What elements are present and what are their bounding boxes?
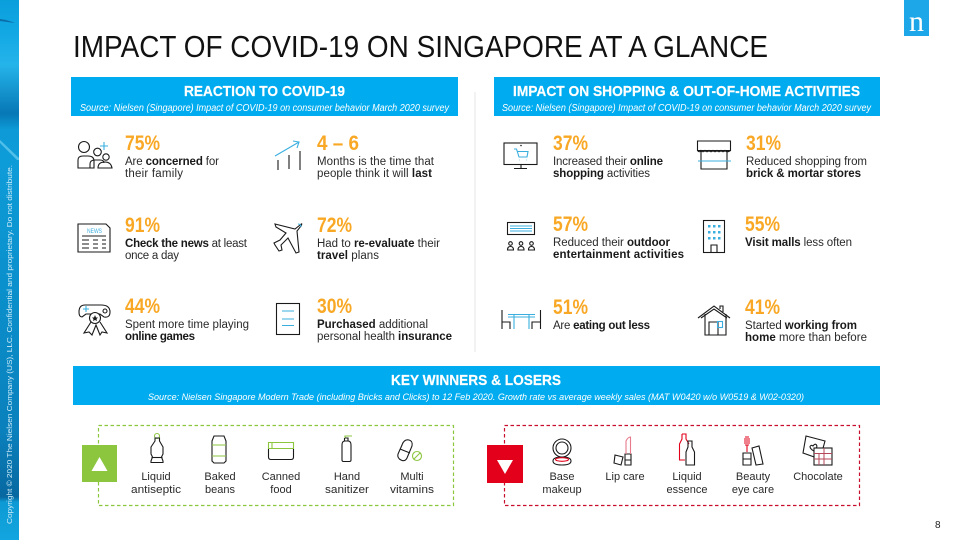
stat: 44% online games: Spent more time playing bbox=[125, 319, 249, 331]
item: beauty eye care: eye care bbox=[732, 484, 774, 496]
stat: 51% eating out bbox=[502, 296, 650, 332]
stat: 30% health insurance: 30% bbox=[317, 295, 352, 318]
item: hand sanitizer bbox=[325, 436, 369, 496]
item: chocolate: Chocolate bbox=[793, 471, 843, 483]
stat: 41% work from home bbox=[698, 296, 867, 344]
stat: 55% visit malls: Visit malls less often bbox=[745, 237, 852, 249]
panel header: impact on shopping: IMPACT ON SHOPPING & OUT-OF-HOME ACTIVITIES bbox=[513, 83, 860, 100]
stat: 75% concerned for family: their family bbox=[125, 168, 183, 180]
item: liquid essence bbox=[667, 434, 707, 496]
stat: 37% online shopping: shopping activities bbox=[553, 168, 650, 180]
panel: losers bbox=[487, 426, 860, 506]
icon: newspaper: NEWS bbox=[87, 228, 103, 235]
stat: 75% concerned for family: Are concerned for bbox=[125, 156, 219, 168]
panel header: impact on shopping bbox=[494, 77, 880, 116]
panel header: key winners and losers: KEY WINNERS & LOSERS bbox=[391, 372, 561, 389]
icon: monitor with cart bbox=[504, 143, 537, 168]
stat: 55% visit malls bbox=[704, 213, 852, 252]
stat: 44% online games: online games bbox=[125, 331, 195, 343]
item: liquid antiseptic bbox=[131, 434, 182, 496]
stat: 44% online games: 44% bbox=[125, 295, 160, 318]
item: baked beans: beans bbox=[205, 484, 235, 496]
icon: newspaper bbox=[78, 224, 110, 252]
stat: 31% brick and mortar bbox=[698, 132, 867, 180]
item: base makeup: Base bbox=[549, 471, 575, 483]
left brand strip with copyright bbox=[0, 0, 19, 540]
stat: 91% news: 91% bbox=[125, 214, 160, 237]
stat: 51% eating out: 51% bbox=[553, 296, 588, 319]
item: hand sanitizer: sanitizer bbox=[325, 484, 369, 496]
stat: 55% visit malls: 55% bbox=[745, 213, 780, 236]
stat: 41% work from home: 41% bbox=[745, 296, 780, 319]
page number: 8 bbox=[935, 520, 941, 531]
item: liquid essence: Liquid bbox=[672, 471, 702, 483]
panel header: reaction to COVID-19 bbox=[71, 77, 458, 116]
icon: family bbox=[78, 142, 112, 168]
stat: 91% news bbox=[78, 214, 248, 262]
stat: 72% travel: travel plans bbox=[317, 250, 379, 262]
item: beauty eye care bbox=[732, 437, 774, 496]
down arrow badge bbox=[487, 445, 523, 483]
item: base makeup bbox=[542, 439, 582, 496]
panel header: reaction to COVID-19: REACTION TO COVID-19 bbox=[184, 83, 345, 100]
panel header: key winners and losers bbox=[73, 366, 880, 405]
stat: 91% news: once a day bbox=[125, 250, 179, 262]
stat: 37% online shopping: Increased their online bbox=[553, 156, 663, 168]
left brand strip with copyright: Copyright © 2020 The Nielsen Company (US), LLC. Confidential and proprietary. Do not distribute. bbox=[5, 165, 14, 524]
item: liquid essence: essence bbox=[667, 484, 707, 496]
icon: house bbox=[698, 306, 730, 335]
item: multivitamins: Multi bbox=[400, 471, 424, 483]
item: hand sanitizer: Hand bbox=[334, 471, 360, 483]
panel: winners bbox=[82, 426, 454, 506]
stat: 4-6 months: people think it will last bbox=[317, 168, 432, 180]
stat: 72% travel bbox=[274, 214, 440, 262]
icon: game controller with medal bbox=[79, 305, 110, 335]
panel header: impact on shopping: Source: Nielsen (Singapore) Impact of COVID-19 on consumer behavior March 2020 survey bbox=[502, 103, 872, 114]
icon: storefront bbox=[698, 141, 731, 169]
stat: 57% outdoor entertainment: Reduced their outdoor bbox=[553, 237, 671, 249]
stat: 72% travel: Had to re-evaluate their bbox=[317, 238, 440, 250]
stat: 75% concerned for family: 75% bbox=[125, 132, 160, 155]
icon: cinema screen and audience bbox=[508, 222, 534, 250]
stat: 4-6 months: Months is the time that bbox=[317, 156, 435, 168]
stat: 44% online games bbox=[79, 295, 249, 343]
icon: dining table and chairs bbox=[502, 310, 540, 329]
item: multivitamins: vitamins bbox=[390, 484, 435, 496]
stat: 31% brick and mortar: brick & mortar stores bbox=[746, 168, 861, 180]
item: liquid antiseptic: Liquid bbox=[141, 471, 171, 483]
stat: 30% health insurance: personal health insurance bbox=[317, 331, 452, 343]
stat: 91% news: Check the news at least bbox=[125, 238, 248, 250]
stat: 57% outdoor entertainment bbox=[508, 213, 684, 261]
stat: 4-6 months bbox=[275, 132, 435, 180]
panel header: key winners and losers: Source: Nielsen Singapore Modern Trade (including Bricks and Clicks) to 12 Feb 2020. Growth rate vs average weekly sales (MAT W0420 w/o W0519 & W02-0320) bbox=[148, 392, 804, 403]
stat: 72% travel: 72% bbox=[317, 214, 352, 237]
item: canned food bbox=[262, 442, 300, 496]
stat: 30% health insurance: Purchased additional bbox=[317, 319, 428, 331]
stat: 30% health insurance bbox=[276, 295, 452, 343]
icon: document bbox=[276, 304, 300, 334]
stat: 31% brick and mortar: 31% bbox=[746, 132, 781, 155]
item: base makeup: makeup bbox=[542, 484, 582, 496]
Nielsen logo bbox=[904, 0, 929, 38]
item: baked beans: Baked bbox=[204, 471, 236, 483]
item: canned food: food bbox=[270, 484, 292, 496]
stat: 57% outdoor entertainment: 57% bbox=[553, 213, 588, 236]
item: canned food: Canned bbox=[262, 471, 300, 483]
icon: growth chart bbox=[275, 141, 300, 170]
stat: 4-6 months: 4 – 6 bbox=[317, 132, 359, 155]
stat: 51% eating out: Are eating out less bbox=[553, 320, 650, 332]
item: lip care bbox=[605, 437, 645, 483]
Nielsen logo: n bbox=[909, 5, 924, 38]
up arrow badge bbox=[82, 445, 117, 482]
item: baked beans bbox=[204, 436, 236, 496]
title: IMPACT OF COVID-19 ON SINGAPORE AT A GLANCE bbox=[73, 30, 768, 64]
icon: mall building bbox=[704, 220, 724, 252]
stat: 41% work from home: home more than before bbox=[745, 332, 867, 344]
stat: 41% work from home: Started working from bbox=[745, 320, 857, 332]
stat: 57% outdoor entertainment: entertainment activities bbox=[553, 249, 684, 261]
item: liquid antiseptic: antiseptic bbox=[131, 484, 182, 496]
stat: 75% concerned for family bbox=[78, 132, 219, 180]
panel header: reaction to COVID-19: Source: Nielsen (Singapore) Impact of COVID-19 on consumer behavior March 2020 survey bbox=[80, 103, 450, 114]
icon: airplane bbox=[274, 224, 302, 253]
stat: 37% online shopping: 37% bbox=[553, 132, 588, 155]
item: chocolate bbox=[793, 436, 843, 483]
item: lip care: Lip care bbox=[605, 471, 645, 483]
stat: 37% online shopping bbox=[504, 132, 663, 180]
item: beauty eye care: Beauty bbox=[736, 471, 771, 483]
item: multivitamins bbox=[390, 440, 435, 496]
stat: 31% brick and mortar: Reduced shopping from bbox=[746, 156, 867, 168]
